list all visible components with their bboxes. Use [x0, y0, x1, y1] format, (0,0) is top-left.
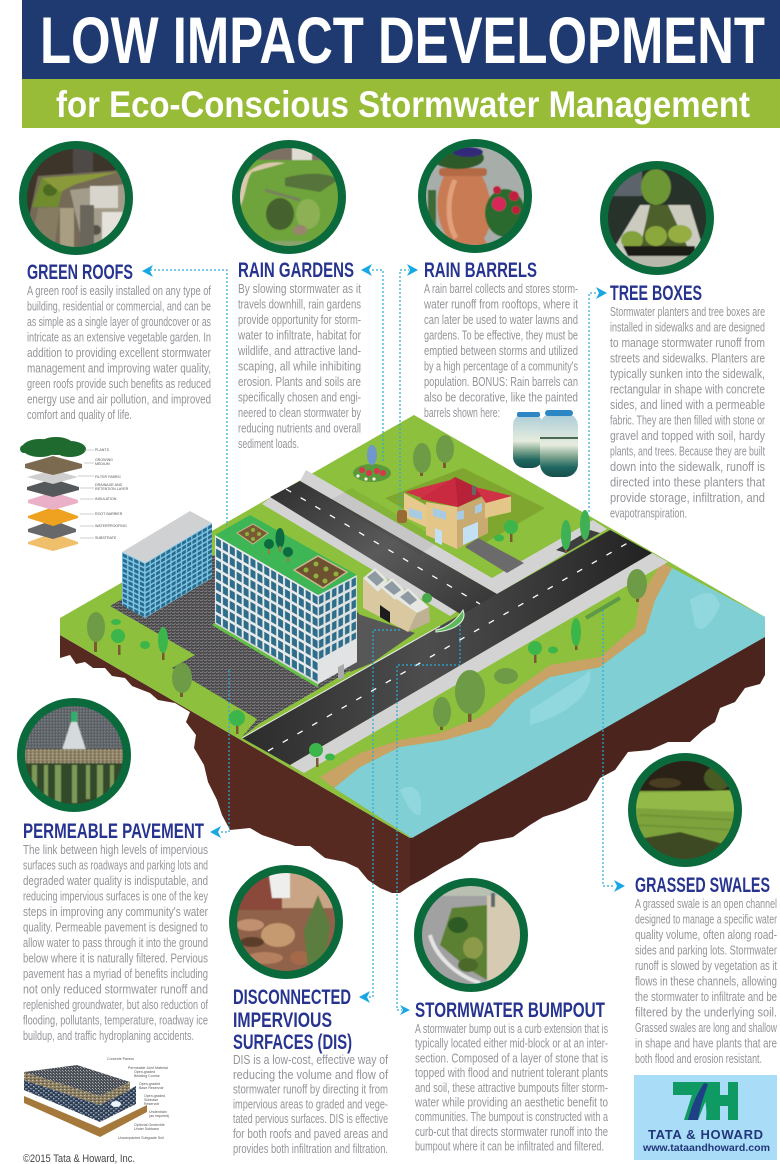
heading: green roofs: GREEN ROOFS	[27, 260, 133, 284]
blue office building	[122, 511, 212, 618]
photo: permeable pavement	[18, 700, 130, 813]
photo: rain gardens	[235, 140, 345, 253]
text: rain gardens: provide opportunity for storm-	[238, 313, 361, 327]
logo: Tata & Howard: TATA & HOWARD	[648, 1127, 763, 1142]
text: green roofs: building, residential or commercial, and can be	[27, 300, 211, 314]
text: stormwater bumpout	[414, 1022, 608, 1154]
text: rain barrels: emptied between storms and utilized	[424, 344, 578, 358]
roof planter small	[237, 524, 268, 544]
heading: stormwater bumpout: STORMWATER BUMPOUT	[415, 998, 605, 1022]
text: stormwater bumpout: communities. The bumpout is constructed with a	[415, 1110, 608, 1124]
permeable pavement cross-section diagram: Base Reservoir	[139, 1086, 164, 1090]
photo: green roofs	[20, 140, 132, 252]
roof trees	[264, 528, 293, 557]
connector: rain barrels	[400, 264, 418, 510]
text: rain barrels: also be decorative, like the painted	[424, 390, 578, 404]
text: rain barrels: gardens. To be effective, they must be	[424, 328, 578, 342]
green roof layers diagram: FILTER FABRIC	[95, 475, 121, 479]
driveway	[465, 538, 524, 573]
rain barrel on house	[397, 510, 407, 523]
text: disconnected impervious surfaces	[233, 1053, 388, 1156]
text: permeable pavement: below where it is naturally filtered. Pervious	[23, 952, 208, 966]
ground surface	[60, 415, 765, 838]
text: permeable pavement: degraded water quality is indisputable, and	[23, 874, 208, 888]
text: tree boxes: evapotranspiration.	[610, 506, 687, 520]
text: grassed swales	[635, 897, 778, 1066]
text: rain gardens	[237, 282, 362, 451]
text: rain barrels	[423, 282, 578, 420]
text: rain gardens: water to infiltrate, habitat for	[237, 328, 361, 342]
text: permeable pavement: buildup, and traffic hydroplaning accidents.	[23, 1029, 194, 1043]
text: stormwater bumpout: bumpout where it can be infiltrated and filtered.	[415, 1140, 604, 1154]
trees	[87, 435, 647, 767]
text: permeable pavement: surfaces such as roadways and parking lots and	[23, 858, 208, 872]
permeable pavement cross-section diagram: Under Subbase	[134, 1127, 159, 1131]
logo: Tata & Howard: www.tataandhoward.com	[642, 1143, 770, 1154]
text: disconnected impervious surfaces: for both roofs and paved areas and	[233, 1127, 388, 1141]
photo: tree boxes	[604, 165, 710, 271]
rain garden	[353, 445, 391, 482]
green roof layers diagram: GROWING	[95, 458, 113, 462]
text: stormwater bumpout: section. Composed of a layer of stone that is	[415, 1051, 608, 1065]
text: rain barrels: by a high percentage of a community's	[424, 360, 578, 374]
text: disconnected impervious surfaces: reducing the volume and flow of	[233, 1068, 388, 1082]
painted barrels	[513, 410, 578, 477]
text: green roofs: A green roof is easily installed on any type of	[27, 284, 211, 298]
text: rain gardens: travels downhill, rain gardens	[238, 298, 361, 312]
side road	[270, 481, 497, 615]
text: permeable pavement: pavement has a myriad of benefits including	[23, 967, 208, 981]
heading: disconnected impervious surfaces	[233, 985, 352, 1054]
permeable pavement cross-section diagram	[24, 1057, 169, 1140]
green roof building	[213, 515, 357, 686]
text: tree boxes: directed into these planters that	[610, 476, 765, 490]
lot shading	[385, 468, 545, 550]
logo mark	[673, 1082, 738, 1120]
logo: Tata & Howard	[634, 1075, 777, 1160]
grassed swale	[586, 598, 620, 618]
parking lot	[350, 613, 415, 672]
text: rain gardens: specifically chosen and engi-	[238, 390, 361, 404]
text: tree boxes	[610, 305, 766, 520]
green roof layers diagram: PLANTS	[95, 448, 110, 452]
text: rain barrels: A rain barrel collects and stores storm-	[424, 282, 578, 296]
text: disconnected impervious surfaces: DIS is a low-cost, effective way of	[233, 1053, 388, 1067]
text: disconnected impervious surfaces: impervious areas to graded and vege-	[233, 1097, 388, 1111]
green roof layers diagram: RETENTION LAYER	[95, 487, 129, 491]
text: rain gardens: reducing nutrients and overall	[238, 422, 361, 436]
text: green roofs: management and improving water quality,	[27, 362, 211, 376]
text: green roofs	[27, 284, 211, 422]
text: green roofs: comfort and quality of life.	[27, 408, 132, 422]
heading: rain gardens: RAIN GARDENS	[238, 258, 354, 282]
water	[334, 568, 765, 838]
permeable pavement cross-section diagram: Open-graded	[144, 1094, 165, 1098]
sand bank	[320, 562, 672, 788]
permeable pavement cross-section diagram: Reservoir	[144, 1102, 160, 1106]
stormwater bumpout	[436, 610, 464, 632]
text: green roofs: intricate as an extensive vegetable garden. In	[27, 330, 211, 344]
text: permeable pavement: steps in improving any community's water	[23, 905, 208, 919]
garage with solar panels	[363, 568, 432, 632]
heading: tree boxes: TREE BOXES	[610, 281, 702, 305]
heading: disconnected impervious surfaces: SURFACES (DIS)	[233, 1030, 352, 1054]
text: tree boxes: provide storage, infiltration, and	[610, 491, 765, 505]
text: rain gardens: wildlife, and attractive land-	[237, 344, 361, 358]
text: green roofs: energy use and air pollution, and improved	[27, 392, 211, 406]
connector: stormwater bumpout	[397, 625, 460, 1015]
text: permeable pavement: flooding, pollutants, temperature, roadway ice	[23, 1014, 208, 1028]
permeable pavement cross-section diagram: Uncompacted Subgrade Soil	[118, 1136, 164, 1140]
soil base	[60, 635, 765, 893]
text: rain gardens: scaping, all while inhibiting	[238, 360, 361, 374]
text: permeable pavement: The link between high levels of impervious	[23, 843, 208, 857]
heading: disconnected impervious surfaces: DISCONNECTED	[233, 985, 351, 1009]
permeable pavement cross-section diagram: (as required)	[149, 1114, 169, 1118]
permeable pavement cross-section diagram: Permeable Joint Material	[128, 1066, 168, 1070]
text: stormwater bumpout: A stormwater bump out is a curb extension that is	[415, 1022, 608, 1036]
permeable pavement cross-section diagram: Open-graded	[139, 1082, 160, 1086]
tree boxes	[556, 510, 600, 553]
text: stormwater bumpout: topped with flood and nutrient tolerant plants	[415, 1066, 608, 1080]
text: rain barrels: barrels shown here:	[424, 406, 500, 420]
permeable pavement cross-section diagram: Concrete Pavers	[107, 1057, 134, 1061]
text: disconnected impervious surfaces: provides both infiltration and filtration.	[233, 1142, 388, 1156]
connector: grassed swales	[603, 610, 625, 892]
text: rain barrels: population. BONUS: Rain barrels can	[424, 375, 578, 389]
text: stormwater bumpout: and soil, these attractive bumpouts filter storm-	[415, 1081, 608, 1095]
text: stormwater bumpout: typically located either mid-block or at an inter-	[415, 1037, 608, 1051]
green roof layers diagram: MEDIUM	[95, 462, 110, 466]
text: stormwater bumpout: curb-cut that directs stormwater runoff into the	[415, 1125, 608, 1139]
text: disconnected impervious surfaces: tated pervious surfaces. DIS is effective	[233, 1112, 388, 1126]
heading: disconnected impervious surfaces: IMPERVIOUS	[233, 1008, 332, 1032]
text: green roofs: as simple as a single layer of groundcover or as	[27, 315, 211, 329]
isometric island illustration	[60, 415, 765, 893]
connector: rain gardens	[361, 264, 383, 463]
connector: green roofs	[142, 265, 227, 526]
heading: permeable pavement: PERMEABLE PAVEMENT	[23, 819, 204, 843]
green roof layers diagram: SUBSTRATE	[95, 536, 117, 540]
text: disconnected impervious surfaces: stormwater runoff by directing it from	[233, 1083, 388, 1097]
heading: rain barrels: RAIN BARRELS	[424, 258, 537, 282]
text: green roofs: addition to providing excellent stormwater	[27, 346, 211, 360]
photo: grassed swales	[632, 757, 738, 865]
green roof layers diagram	[20, 437, 129, 551]
text: rain gardens: sediment loads.	[238, 437, 299, 451]
text: permeable pavement: reducing impervious surfaces is one of the key	[23, 890, 209, 904]
permeable pavement cross-section diagram: Open-graded	[134, 1070, 155, 1074]
text: permeable pavement	[23, 843, 209, 1043]
text: rain gardens: erosion. Plants and soils are	[238, 375, 361, 389]
text: permeable pavement: replenished groundwater, but also reduction of	[23, 998, 208, 1012]
connector: tree boxes	[589, 287, 607, 512]
house with red roof	[397, 477, 512, 549]
green roof layers diagram: DRAINAGE AND	[95, 483, 123, 487]
text: rain gardens: By slowing stormwater as it	[238, 282, 361, 296]
green roof layers diagram: WATERPROOFING	[95, 524, 127, 528]
text: permeable pavement: quality. Permeable pavement is designed to	[23, 920, 208, 934]
text: rain barrels: can later be used to water lawns and	[424, 313, 578, 327]
water ripples	[400, 593, 720, 815]
green roof layers diagram: ROOT BARRIER	[95, 512, 123, 516]
text: permeable pavement: not only reduced stormwater runoff and	[23, 982, 208, 996]
text: stormwater bumpout: water while providing an aesthetic benefit to	[414, 1096, 608, 1110]
text: rain barrels: water runoff from rooftops, where it	[423, 298, 578, 312]
photo: disconnected impervious surfaces	[232, 868, 340, 976]
permeable pavement cross-section diagram: Optional Geotextile	[134, 1123, 165, 1127]
text: permeable pavement: allow water to pass through it into the ground	[23, 936, 208, 950]
roof planter large	[294, 556, 347, 588]
permeable pavement cross-section diagram: Underdrain	[149, 1110, 167, 1114]
green roof layers diagram: INSULATION	[95, 497, 117, 501]
main road	[242, 530, 652, 765]
pavement	[110, 555, 385, 722]
connector: disconnected impervious surfaces	[359, 630, 400, 1003]
text: green roofs: green roofs provide such benefits as reduced	[27, 377, 211, 391]
connector: permeable pavement	[210, 670, 229, 838]
road markings	[268, 489, 631, 751]
sidewalks	[262, 470, 668, 773]
photo: rain barrels	[420, 140, 532, 252]
text: rain gardens: neered to clean stormwater by	[238, 406, 362, 420]
permeable pavement cross-section diagram: Bedding Course	[134, 1074, 160, 1078]
photo: stormwater bumpout	[418, 882, 524, 988]
permeable pavement cross-section diagram: Subbase	[144, 1098, 158, 1102]
